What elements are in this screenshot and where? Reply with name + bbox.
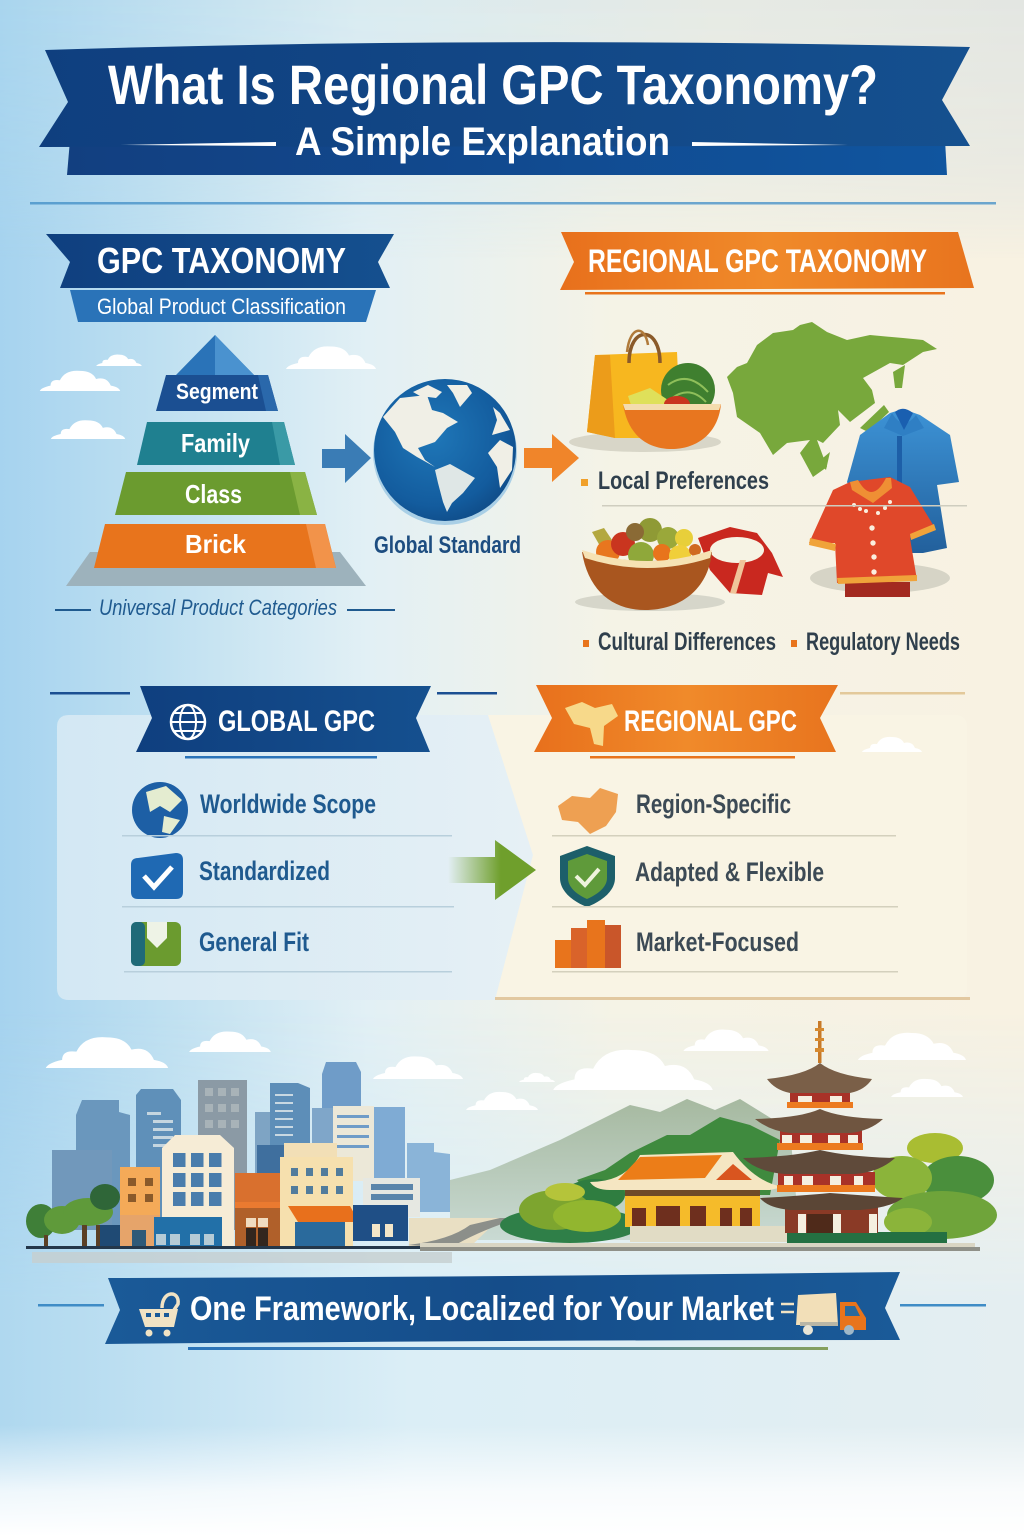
title banner [39,42,970,175]
icon: Asia map [727,322,937,477]
footer banner [38,1272,986,1350]
tier: family [137,422,295,465]
arrow: global to regional [448,840,536,900]
icon: red shirt [809,477,950,597]
illustration: trees and hills [500,1117,997,1243]
label: local preferences: Local Preferences [598,467,769,495]
tier: class: Class [185,479,242,509]
icon: shopping cart [139,1294,178,1336]
panel heading: GPC taxonomy: GPC TAXONOMY [97,240,346,281]
illustration: pagoda [743,1021,903,1233]
panel heading: regional GPC taxonomy [560,232,974,294]
header ribbon: global GPC: GLOBAL GPC [218,705,375,738]
cream shop building [280,1143,359,1248]
row: region-specific [552,788,896,836]
tier: class [115,472,317,515]
brick building [235,1173,280,1248]
icon: shopping bag with food [569,331,721,452]
row: adapted and flexible [552,846,898,908]
label: global standard: Global Standard [374,532,521,559]
header ribbon: regional GPC: REGIONAL GPC [624,705,797,738]
row: worldwide scope: Worldwide Scope [200,789,376,819]
arrow: globe to regional [524,434,579,482]
label: regulatory needs: Regulatory Needs [806,628,960,656]
icon: food bowl and red cloth [575,518,783,611]
row: market-focused [552,920,898,972]
illustration: city skyline [26,1062,450,1248]
label: regulatory needs [791,628,960,656]
row: standardized [122,853,454,908]
row: adapted and flexible: Adapted & Flexible [635,857,824,887]
label: local preferences [581,467,967,506]
comparison panel: global GPC [50,686,533,1000]
panel heading: GPC taxonomy [46,234,394,322]
row: general fit [124,922,452,972]
illustration: traditional hall [590,1152,787,1242]
tier: brick: Brick [185,529,246,559]
title subheading: A Simple Explanation [295,120,670,164]
icon: delivery truck [781,1293,866,1335]
icon: blue shirt [847,409,959,553]
tier: segment [156,375,278,411]
caption: universal product categories: Universal Product Categories [99,595,337,620]
arrow: pyramid to globe [322,434,371,483]
illustration: mountains [450,1099,800,1240]
clouds: scene [46,1030,966,1110]
row: region-specific: Region-Specific [636,789,791,819]
header ribbon: global GPC [136,686,431,758]
footer text: One Framework, Localized for Your Market [190,1290,774,1328]
tier: brick [94,524,336,568]
tier: family: Family [181,428,250,458]
illustration: road and ground [26,1218,980,1263]
back buildings [52,1062,450,1230]
tier: segment: Segment [176,379,259,404]
label: cultural differences: Cultural Differences [598,628,776,656]
panel heading: regional GPC taxonomy: REGIONAL GPC TAXONOMY [588,243,927,279]
panel heading: GPC taxonomy: Global Product Classification [97,294,346,319]
icon: globe [373,379,517,525]
pyramid chart [66,335,366,586]
row: general fit: General Fit [199,927,309,957]
trees [26,1184,120,1248]
comparison panel: regional GPC [488,685,970,1000]
orange building [120,1167,160,1248]
clouds: left panel [40,346,376,439]
row: standardized: Standardized [199,856,330,886]
cloud [862,737,922,752]
row: worldwide scope [122,782,452,838]
title heading: What Is Regional GPC Taxonomy? [108,53,878,116]
navy shop and low office [353,1178,420,1241]
header ribbon: regional GPC [534,685,838,758]
row: market-focused: Market-Focused [636,927,799,957]
cream building [154,1135,234,1248]
